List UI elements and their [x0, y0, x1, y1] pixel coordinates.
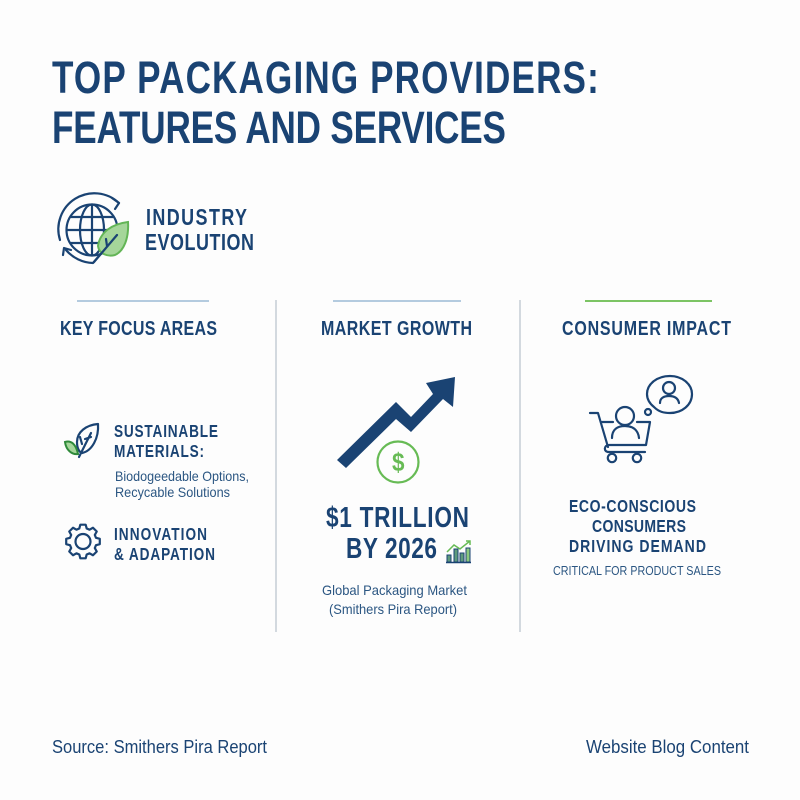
text: eco-conscious consumers: DRIVING DEMAND [569, 536, 706, 556]
icon: dollar coin: $ [392, 447, 405, 477]
icon: leaves [65, 424, 98, 457]
stat: 1 trillion by 2026: BY 2026 [346, 531, 437, 565]
text: market source: (Smithers Pira Report) [329, 601, 457, 617]
panel: market growth [321, 300, 472, 617]
icon: cart with shopper [590, 407, 650, 462]
text: sustainable materials: Biodogeedable Options, [115, 468, 249, 484]
text: innovation and adapation: & ADAPATION [114, 546, 215, 564]
heading: consumer impact: CONSUMER IMPACT [562, 316, 732, 339]
footer: source: Source: Smithers Pira Report [52, 737, 267, 757]
text: critical for product sales: CRITICAL FOR PRODUCT SALES [553, 563, 721, 578]
stat: 1 trillion by 2026 [326, 500, 469, 565]
heading: market growth: MARKET GROWTH [321, 316, 472, 339]
heading: industry evolution [145, 205, 254, 256]
title [52, 52, 599, 153]
text: eco-conscious consumers: CONSUMERS [592, 516, 686, 536]
footer: website blog content: Website Blog Content [586, 737, 749, 757]
stat: 1 trillion by 2026: $1 TRILLION [326, 500, 469, 534]
heading: industry evolution: INDUSTRY [146, 205, 247, 231]
text: sustainable materials: SUSTAINABLE [114, 423, 218, 441]
panel: consumer impact [553, 300, 732, 578]
heading: industry evolution: EVOLUTION [145, 230, 254, 256]
icon: speech bubble with person [645, 376, 692, 415]
icon: gear [66, 525, 100, 558]
icon: rising arrow [337, 377, 455, 468]
icon: mini bar chart [446, 541, 471, 562]
title: FEATURES AND SERVICES [52, 102, 506, 153]
text: market source: Global Packaging Market [322, 582, 467, 598]
text: eco-conscious consumers: ECO-CONSCIOUS [569, 496, 696, 516]
text: eco-conscious consumers [569, 496, 706, 556]
heading: key focus areas: KEY FOCUS AREAS [60, 316, 217, 339]
icon: globe with leaf [58, 193, 128, 263]
text: sustainable materials: Recycable Solutions [115, 484, 230, 500]
text: innovation and adapation [114, 526, 215, 564]
title: TOP PACKAGING PROVIDERS: [52, 52, 599, 103]
text: sustainable materials: MATERIALS: [114, 443, 204, 461]
text: innovation and adapation: INNOVATION [114, 526, 207, 544]
icon: dollar coin [378, 442, 418, 482]
text: sustainable materials [114, 423, 249, 500]
panel: key focus areas [60, 300, 249, 564]
text: market source [322, 582, 467, 617]
